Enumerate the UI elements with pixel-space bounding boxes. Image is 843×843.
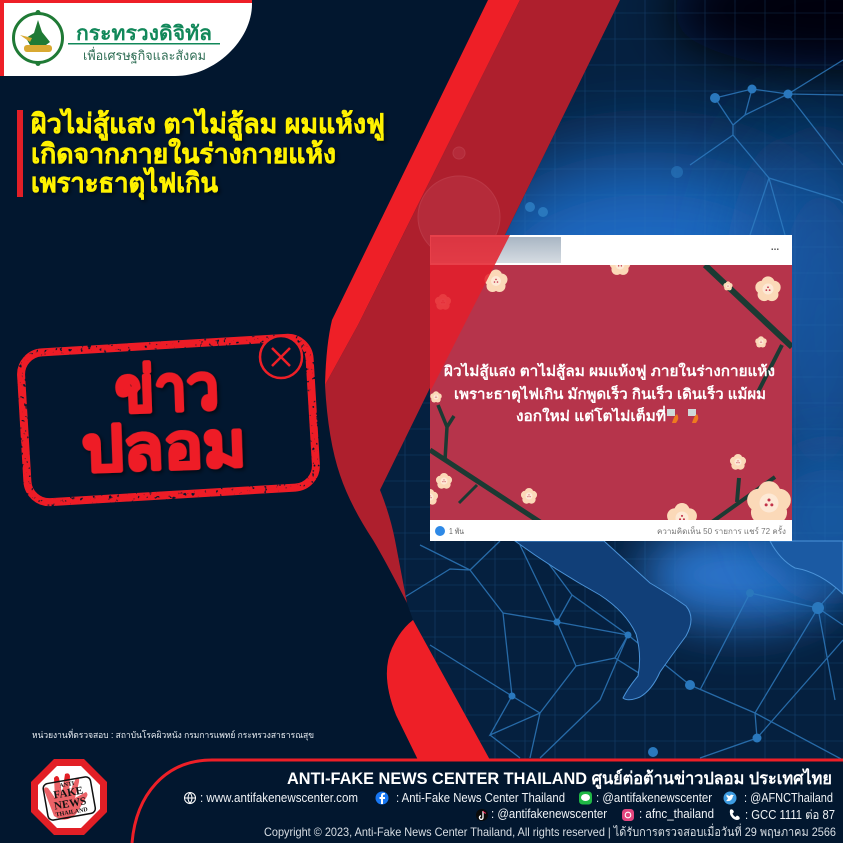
- headline text: [31, 108, 385, 200]
- background image: blue network and running figure: [370, 0, 843, 760]
- broken fire emojis: [667, 409, 698, 423]
- stamp text: ข่าว: [114, 353, 220, 426]
- icon: instagram: [622, 809, 634, 821]
- logo wordmark: [42, 776, 96, 821]
- post message: [443, 362, 775, 425]
- contact links row 2: : @antifakenewscenter: [491, 807, 607, 821]
- ministry seal: [14, 10, 62, 66]
- bright red lower blob: [387, 620, 490, 760]
- headline text: ผิวไม่สู้แสง ตาไม่สู้ลม ผมแห้งฟู: [31, 108, 385, 141]
- footer bar: [132, 760, 843, 843]
- headline text: เพราะธาตุไฟเกิน: [31, 167, 219, 200]
- post menu dots: ...: [771, 242, 779, 253]
- logo panel: [0, 0, 252, 76]
- headline: [17, 108, 385, 200]
- diagonal bright red stripe: [325, 0, 520, 385]
- ministry rule: [68, 43, 220, 44]
- logo wordmark: FAKE: [53, 785, 84, 802]
- ministry tagline: เพื่อเศรษฐกิจและสังคม: [83, 47, 206, 64]
- contact links row 1: : @AFNCThailand: [744, 791, 833, 805]
- contact links row 1: : @antifakenewscenter: [596, 791, 712, 805]
- icon: twitter: [724, 792, 736, 804]
- logo wordmark: THAILAND: [55, 807, 89, 819]
- post card: [430, 235, 792, 541]
- contact links row 1: [200, 791, 833, 805]
- headline accent bar: [17, 110, 23, 197]
- contact links row 1: : Anti-Fake News Center Thailand: [396, 791, 565, 805]
- comments and shares count: ความคิดเห็น 50 รายการ แชร์ 72 ครั้ง: [657, 525, 786, 536]
- verifying agency source: หน่วยงานที่ตรวจสอบ : สถาบันโรคผิวหนัง กรมการแพทย์ กระทรวงสาธารณสุข: [32, 728, 314, 741]
- social post screenshot: [422, 235, 792, 541]
- post message: งอกใหม่ แต่โตไม่เต็มที่: [516, 405, 666, 425]
- post artwork: [430, 265, 792, 520]
- fake news stamp: [20, 336, 317, 503]
- running figure: second leg: [770, 541, 843, 594]
- stamp x badge: [260, 336, 302, 378]
- post message: ผิวไม่สู้แสง ตาไม่สู้ลม ผมแห้งฟู ภายในร่างกายแห้ง: [443, 362, 775, 380]
- stamp text: ปลอม: [81, 410, 247, 485]
- icon: line: [579, 792, 592, 804]
- stamp text: [79, 352, 247, 485]
- logo hand: [44, 773, 88, 820]
- diagonal dark red band: [325, 0, 620, 603]
- ministry name: กระทรวงดิจิทัล: [76, 23, 212, 45]
- contact links row 2: : afnc_thailand: [639, 807, 714, 821]
- stamp border: [20, 337, 317, 503]
- running figure: leg and foot: [515, 541, 691, 700]
- reactions count: 1 พัน: [449, 527, 464, 536]
- headline text: เกิดจากภายในร่างกายแห้ง: [31, 138, 336, 169]
- post message: เพราะธาตุไฟเกิน มักพูดเร็ว กินเร็ว เดินเร็ว แม้ผม: [454, 384, 766, 403]
- contact links row 2: : GCC 1111 ต่อ 87: [745, 808, 835, 822]
- blurred account name: [431, 237, 561, 263]
- logo wordmark: ANTI: [59, 781, 75, 789]
- icon: phone: [730, 809, 740, 820]
- contact links row 2: [491, 807, 835, 822]
- faint figure head in red band: [418, 147, 500, 258]
- logo wordmark: NEWS: [53, 795, 87, 813]
- reactions count: [435, 526, 464, 536]
- contact links row 1: : www.antifakenewscenter.com: [200, 791, 358, 805]
- footer title: ANTI-FAKE NEWS CENTER THAILAND ศูนย์ต่อต้านข่าวปลอม ประเทศไทย: [287, 768, 832, 790]
- icon: facebook: [376, 792, 388, 804]
- icon: tiktok: [476, 809, 488, 821]
- red band overlay on post: [430, 235, 510, 392]
- anti-fake news octagon logo: [31, 759, 107, 835]
- icon: globe: [184, 792, 196, 804]
